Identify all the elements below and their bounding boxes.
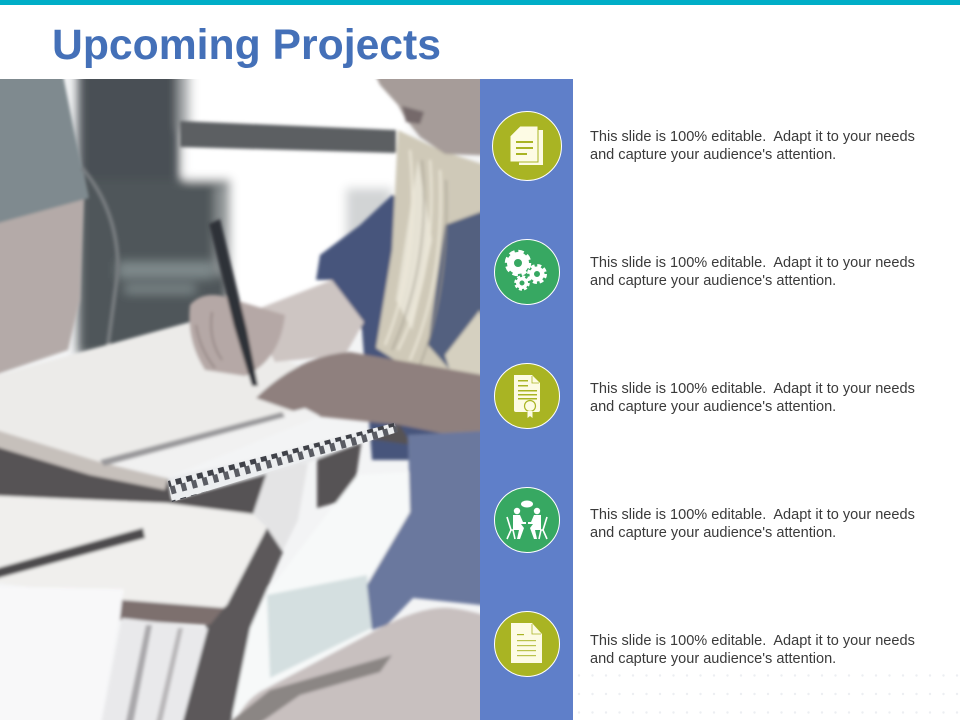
icon: text document xyxy=(494,611,560,677)
dark under notebook xyxy=(0,425,412,514)
text block 2: This slide is 100% editable. Adapt it to your needs xyxy=(590,255,915,271)
text block 3: and capture your audience's attention. xyxy=(590,399,836,415)
text block 1: This slide is 100% editable. Adapt it to your needs xyxy=(590,129,915,145)
shirt left xyxy=(0,60,89,228)
text block 5 xyxy=(590,633,915,667)
bright seat xyxy=(222,472,412,720)
table plank xyxy=(253,463,308,562)
spiral notebook page xyxy=(100,408,320,478)
text block 5: This slide is 100% editable. Adapt it to your needs xyxy=(590,633,915,649)
photo: woman writing in a notebook xyxy=(0,79,480,720)
navy lower shirt xyxy=(367,430,500,630)
text block 5: and capture your audience's attention. xyxy=(590,651,836,667)
pen xyxy=(209,219,258,386)
arm left xyxy=(0,198,84,380)
top accent bar xyxy=(0,0,960,5)
writing hand xyxy=(189,295,285,376)
text block 4: This slide is 100% editable. Adapt it to your needs xyxy=(590,507,915,523)
title: Upcoming Projects xyxy=(52,21,441,69)
text block 1 xyxy=(590,129,915,163)
icon: meeting xyxy=(494,487,560,553)
keyboard frame xyxy=(120,600,224,625)
lower papers xyxy=(0,495,267,622)
text block 3 xyxy=(590,381,915,415)
text block 4: and capture your audience's attention. xyxy=(590,525,836,541)
desk/notebook page xyxy=(0,322,310,468)
leg xyxy=(228,608,500,720)
icon: gears xyxy=(494,239,560,305)
icon: documents xyxy=(492,111,562,181)
text block 2 xyxy=(590,255,915,289)
text block 2: and capture your audience's attention. xyxy=(590,273,836,289)
text block 1: and capture your audience's attention. xyxy=(590,147,836,163)
text block 4 xyxy=(590,507,915,541)
lower hand and arm xyxy=(256,352,500,445)
forearm xyxy=(250,280,364,362)
dark beam xyxy=(175,528,283,720)
keyboard xyxy=(98,618,208,720)
window bar xyxy=(180,121,396,153)
dotted decoration xyxy=(578,674,958,714)
icon: certificate xyxy=(494,363,560,429)
navy shirt xyxy=(316,195,500,460)
chair xyxy=(82,168,118,345)
hair xyxy=(376,130,500,462)
spiral binding xyxy=(168,423,398,502)
text block 3: This slide is 100% editable. Adapt it to your needs xyxy=(590,381,915,397)
panel: blue column xyxy=(480,79,573,720)
face xyxy=(368,60,500,156)
